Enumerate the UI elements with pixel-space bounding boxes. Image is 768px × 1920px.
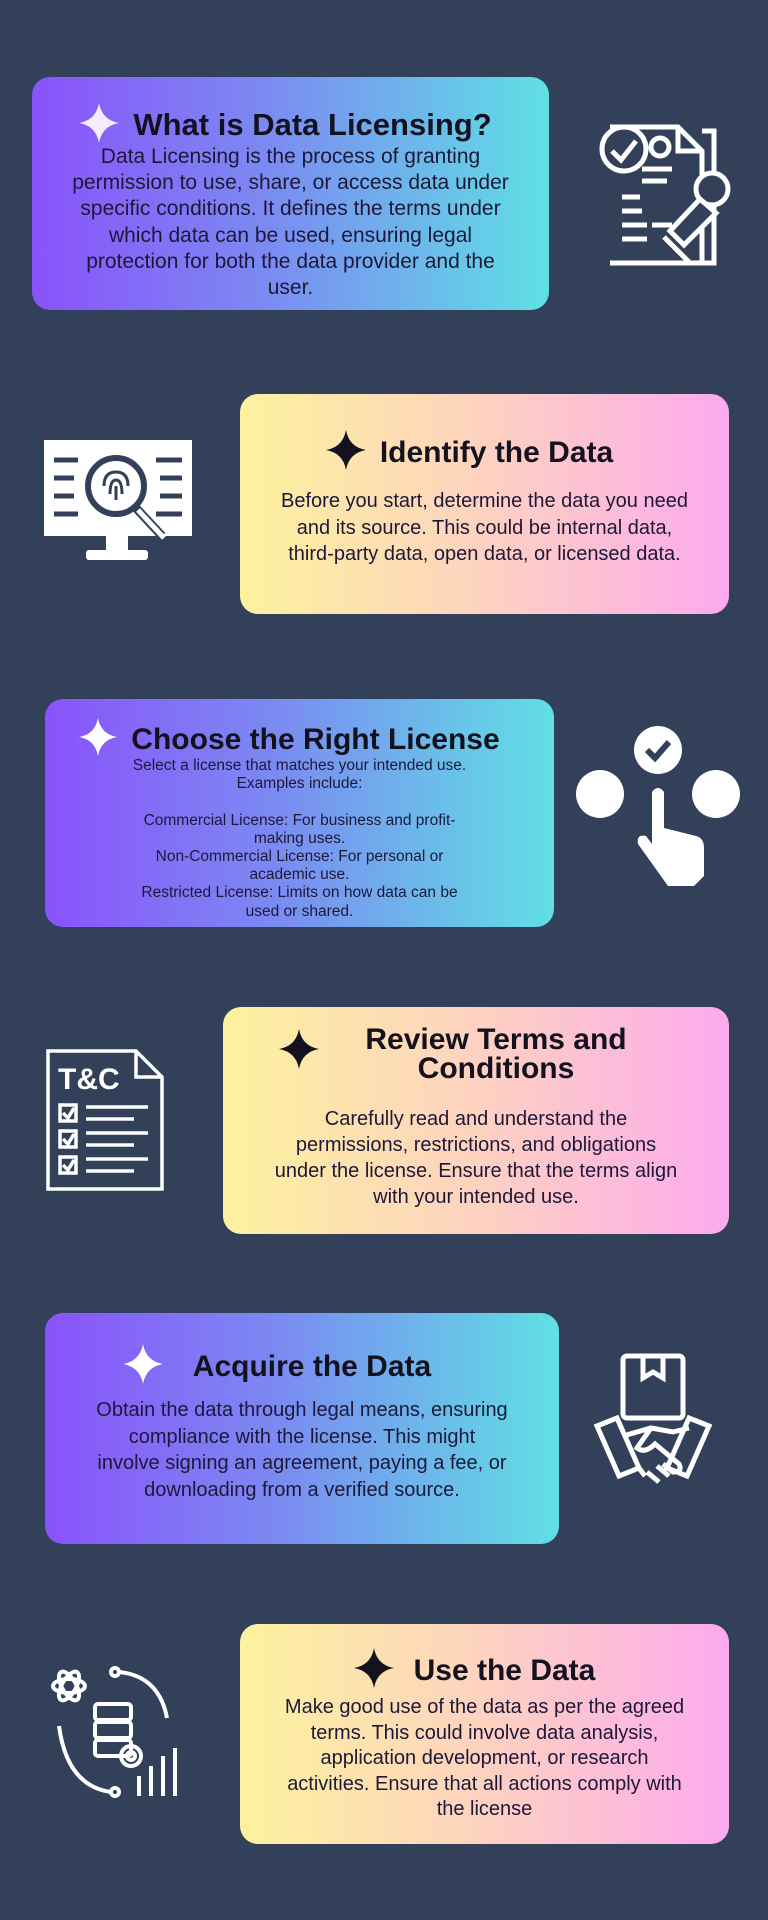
panel: acquire the data: [45, 1313, 559, 1544]
heading: choose the right license: Choose the Right License: [131, 723, 500, 756]
text: definition: [72, 145, 509, 299]
heading: review terms and conditions: Review Terms and: [365, 1023, 627, 1056]
panel: identify the data: [240, 394, 729, 614]
text: identify description: [281, 490, 688, 565]
text: identify description: and its source. This could be internal data,: [297, 516, 672, 538]
text: license examples: Non-Commercial License: For personal or: [156, 848, 443, 865]
heading: acquire the data: [123, 1344, 432, 1384]
text: use description: [285, 1696, 684, 1820]
icon: stamped document: [600, 124, 730, 266]
panel: review terms and conditions: [223, 1007, 729, 1234]
heading: use the data: Use the Data: [414, 1654, 595, 1687]
text: use description: terms. This could involve data analysis,: [311, 1722, 658, 1744]
text: acquire description: Obtain the data through legal means, ensuring: [96, 1399, 508, 1421]
heading: identify the data: [326, 430, 614, 470]
text: definition: protection for both the data provider and the: [86, 250, 495, 273]
text: acquire description: [96, 1399, 508, 1500]
text: review description: under the license. Ensure that the terms align: [275, 1160, 677, 1182]
text: acquire description: compliance with the license. This might: [129, 1426, 475, 1448]
text: license examples: Examples include:: [237, 775, 362, 792]
panel: what is data licensing: [32, 77, 549, 310]
heading: review terms and conditions: [365, 1023, 627, 1085]
text: use description: activities. Ensure that all actions comply with: [287, 1772, 682, 1794]
text: license examples: academic use.: [250, 866, 349, 883]
text: acquire description: downloading from a verified source.: [144, 1478, 460, 1500]
text: review description: with your intended use.: [373, 1186, 579, 1208]
icon: T&C document: T&C: [58, 1063, 120, 1096]
text: acquire description: involve signing an agreement, paying a fee, or: [97, 1452, 507, 1474]
heading: what is data licensing: What is Data Licensing?: [133, 107, 492, 142]
text: definition: permission to use, share, or access data under: [72, 171, 509, 194]
text: license examples: Commercial License: For business and profit-: [144, 812, 455, 829]
text: use description: Make good use of the data as per the agreed: [285, 1696, 684, 1718]
text: definition: Data Licensing is the process of granting: [101, 145, 480, 168]
icon: monitor with fingerprint search: [44, 440, 192, 560]
text: review description: Carefully read and understand the: [325, 1108, 627, 1130]
heading: use the data: [354, 1648, 596, 1688]
text: license examples: Select a license that matches your intended use.: [133, 757, 466, 774]
text: identify description: Before you start, determine the data you need: [281, 490, 688, 512]
text: identify description: third-party data, open data, or licensed data.: [288, 543, 681, 565]
text: review description: [275, 1108, 677, 1208]
text: license examples: Restricted License: Limits on how data can be: [141, 884, 458, 901]
text: license examples: [133, 757, 466, 920]
text: definition: user.: [268, 276, 313, 299]
text: review description: permissions, restrictions, and obligations: [296, 1134, 656, 1156]
icon: T&C document: [46, 1049, 164, 1191]
icon: hand selecting option: [576, 726, 740, 886]
heading: review terms and conditions: Conditions: [418, 1052, 574, 1085]
text: use description: application development, or research: [321, 1747, 648, 1769]
panel: choose the right license: [45, 699, 554, 927]
panel: use the data: [240, 1624, 729, 1844]
heading: identify the data: Identify the Data: [380, 436, 613, 469]
text: license examples: used or shared.: [246, 903, 353, 920]
icon: handshake with box: [594, 1354, 712, 1484]
icon: black star: [279, 1029, 319, 1069]
text: definition: specific conditions. It defines the terms under: [80, 197, 501, 220]
text: use description: the license: [437, 1798, 532, 1820]
text: license examples: making uses.: [254, 830, 345, 847]
icon: data server cycle: [51, 1666, 177, 1798]
heading: acquire the data: Acquire the Data: [193, 1350, 431, 1383]
text: definition: which data can be used, ensuring legal: [109, 224, 472, 247]
